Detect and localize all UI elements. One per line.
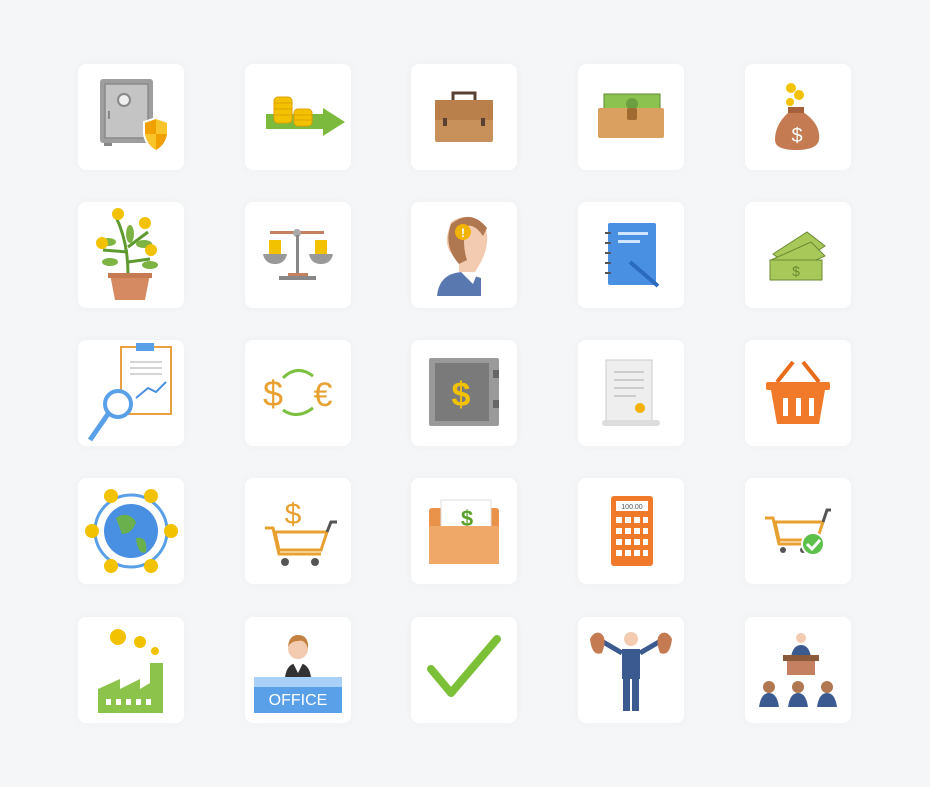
card: office receptionist [245,617,351,723]
card: folder with bill: $ [461,506,473,531]
card: dollar cart [245,478,351,584]
card: currency exchange: € [314,376,333,414]
card: checkmark [411,617,517,723]
card: safe with shield [78,64,184,170]
card: briefcase [411,64,517,170]
card: currency exchange [245,340,351,446]
card: money bag: $ [791,125,803,147]
card: coins arrow [245,64,351,170]
card: currency exchange: $ [263,373,283,414]
card: factory coins [78,617,184,723]
card: teacher and audience [745,617,851,723]
card: scale [245,202,351,308]
card: money bag [745,64,851,170]
card: wallet with cash [578,64,684,170]
card: notebook [578,202,684,308]
card: money plant [78,202,184,308]
card: folder with bill [411,478,517,584]
card: calculator [578,478,684,584]
card: dollar safe [411,340,517,446]
card: thinking man: ! [461,226,465,240]
card: office receptionist: OFFICE [269,692,327,709]
card: report magnifier [78,340,184,446]
card: businessman with money bags [578,617,684,723]
card: basket [745,340,851,446]
card: cash stack: $ [792,263,800,279]
card: dollar safe: $ [452,376,471,414]
card: calculator: 100.00 [621,504,643,511]
card: thinking man [411,202,517,308]
card: dollar cart: $ [285,498,302,531]
card: globe with coins [78,478,184,584]
card: cart with check [745,478,851,584]
card: cash stack [745,202,851,308]
card: certificate scroll [578,340,684,446]
